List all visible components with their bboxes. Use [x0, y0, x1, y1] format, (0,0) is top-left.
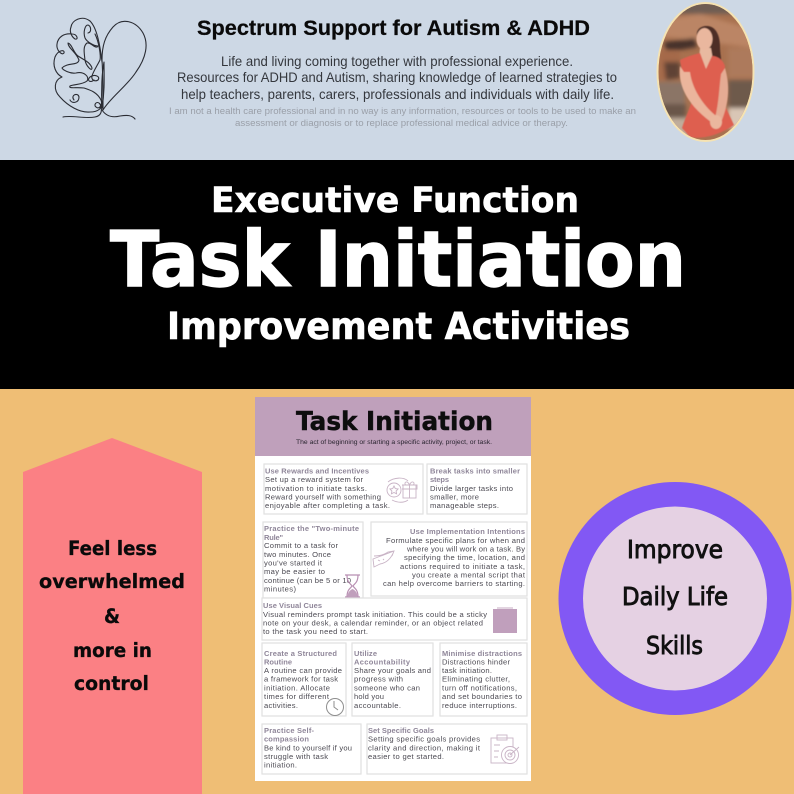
card: utilize accountability: someone who can — [354, 684, 420, 692]
card: create a structured routine — [262, 643, 346, 716]
icon: hourglass — [345, 575, 360, 597]
card: use implementation intentions: you create a mental script that — [412, 570, 526, 580]
card: practice self-compassion: Practice Self- — [264, 726, 314, 735]
icon: brain and heart line drawing — [54, 18, 146, 119]
icon: clock — [326, 698, 344, 716]
icon: plan arrow — [373, 551, 394, 567]
card: utilize accountability: hold you — [354, 692, 384, 701]
card: minimise distractions: Minimise distractions — [442, 649, 522, 658]
icon: clipboard and target — [491, 735, 519, 764]
text: disclaimer — [169, 106, 636, 129]
card: set specific goals: easier to get started. — [368, 752, 444, 761]
text: improve daily life skills: Improve — [627, 535, 723, 564]
text: feel less overwhelmed: more in — [73, 639, 152, 662]
card: two-minute rule: may be easier to — [264, 567, 325, 576]
text: feel less overwhelmed — [39, 537, 185, 695]
text: feel less overwhelmed: & — [104, 605, 120, 628]
card: two-minute rule: Practice the "Two-minute — [264, 524, 359, 533]
card: use rewards and incentives — [264, 464, 423, 514]
card: use rewards and incentives: Set up a reward system for — [265, 475, 363, 484]
panel: upward arrow callout — [23, 438, 202, 794]
card: use visual cues: to the task you need to start. — [263, 627, 368, 636]
text: feel less overwhelmed: control — [74, 672, 149, 695]
card: practice self-compassion: initiation. — [264, 760, 297, 770]
text: description: help teachers, parents, carers, professionals and individuals with daily life. — [181, 86, 614, 102]
title: Task Initiation: Task Initiation — [110, 216, 686, 305]
panel: daily life skills circle — [558, 482, 792, 715]
card: create a structured routine: Create a Structured — [264, 649, 337, 658]
card: utilize accountability: Utilize — [354, 649, 377, 658]
card: use implementation intentions: Use Implementation Intentions — [410, 527, 525, 536]
text: description — [177, 53, 617, 102]
card: minimise distractions: task initiation. — [442, 666, 492, 675]
card: minimise distractions: Eliminating clutter, — [442, 674, 510, 684]
card: minimise distractions: Distractions hinder — [442, 658, 510, 666]
card: break tasks into smaller steps: steps — [430, 475, 449, 484]
photo: woman in coral dress — [655, 0, 757, 145]
card: set specific goals: Setting specific goals provides — [368, 734, 480, 744]
card: break tasks into smaller steps: manageable steps. — [430, 501, 499, 510]
card: use rewards and incentives: Use Rewards and Incentives — [265, 466, 369, 476]
card: two-minute rule — [263, 522, 363, 598]
card: utilize accountability: Share your goals and — [354, 666, 431, 675]
card: use visual cues: Visual reminders prompt task initiation. This could be a sticky — [263, 610, 487, 619]
card: minimise distractions: turn off notifications, — [442, 684, 517, 692]
text: disclaimer: I am not a health care professional and in no way is any information, resources or tools to be used to make an — [169, 106, 636, 117]
card: set specific goals — [367, 724, 527, 774]
card: use implementation intentions: Formulate specific plans for when and — [386, 536, 525, 545]
heading: organisation name: Spectrum Support for Autism & ADHD — [197, 17, 590, 40]
card: practice self-compassion: compassion — [264, 734, 309, 744]
card: practice self-compassion: Be kind to yourself if you — [264, 744, 352, 752]
card: create a structured routine: Routine — [264, 658, 292, 666]
text: improve daily life skills — [622, 535, 728, 660]
card: minimise distractions: reduce interruptions. — [442, 701, 517, 710]
card: utilize accountability — [352, 643, 433, 716]
card: use visual cues: Use Visual Cues — [263, 601, 322, 610]
title band — [0, 160, 794, 389]
card: two-minute rule: you've started it — [264, 558, 323, 568]
card: use rewards and incentives: motivation to initiate tasks. — [265, 484, 367, 493]
card: two-minute rule: two minutes. Once — [264, 550, 331, 559]
card: minimise distractions — [440, 643, 527, 716]
card: break tasks into smaller steps: smaller, more — [430, 492, 479, 502]
header band — [0, 0, 794, 160]
card: two-minute rule: Rule" — [264, 533, 283, 542]
text: improve daily life skills: Skills — [646, 631, 703, 660]
card: create a structured routine: a framework for task — [264, 674, 338, 684]
icon: reward gift — [387, 478, 417, 502]
card: create a structured routine: times for different — [264, 692, 330, 701]
card: use implementation intentions: where you will work on a task. By — [406, 544, 525, 554]
card: use implementation intentions — [371, 522, 527, 596]
text: improve daily life skills: Daily Life — [622, 582, 728, 611]
title: Improvement Activities: Improvement Activities — [167, 305, 630, 348]
worksheet header — [255, 397, 531, 456]
card: use visual cues: note on your desk, a calendar reminder, or an object related — [263, 618, 483, 628]
card: break tasks into smaller steps: Break tasks into smaller — [430, 466, 520, 476]
text: description: Resources for ADHD and Autism, sharing knowledge of learned strategies to — [177, 69, 617, 85]
card: set specific goals: Set Specific Goals — [368, 726, 434, 735]
card: use implementation intentions: specifying the time, location, and — [404, 553, 525, 562]
card: minimise distractions: and set boundaries to — [442, 692, 522, 701]
text: feel less overwhelmed: overwhelmed — [39, 570, 185, 593]
card: use implementation intentions: actions required to initiate a task, — [400, 562, 525, 571]
text: feel less overwhelmed: Feel less — [68, 537, 157, 560]
card: create a structured routine: initiation. Allocate — [264, 684, 330, 692]
worksheet header: The act of beginning or starting a specific activity, project, or task. — [296, 439, 492, 446]
card: create a structured routine: activities. — [264, 701, 298, 710]
card: two-minute rule: Commit to a task for — [264, 541, 338, 550]
card: use visual cues — [262, 598, 527, 640]
text: disclaimer: assessment or diagnosis or to replace professional medical advice or therapy. — [235, 118, 568, 129]
card: utilize accountability: progress with — [354, 674, 403, 684]
card: break tasks into smaller steps: Divide larger tasks into — [430, 484, 513, 493]
card: two-minute rule: minutes) — [264, 584, 296, 594]
icon: sticky note — [493, 607, 517, 633]
panel: task initiation worksheet — [255, 397, 531, 781]
card: use implementation intentions: can help overcome barriers to starting. — [383, 579, 525, 588]
worksheet header: Task Initiation — [296, 407, 493, 437]
card: use rewards and incentives: Reward yourself with something — [265, 492, 381, 502]
card: utilize accountability: accountable. — [354, 701, 401, 710]
card: two-minute rule: continue (can be 5 or 10 — [264, 576, 351, 585]
card: use rewards and incentives: enjoyable after completing a task. — [265, 501, 390, 510]
text: description: Life and living coming together with professional experience. — [221, 53, 573, 69]
title: Executive Function: Executive Function — [211, 181, 579, 221]
card: practice self-compassion: struggle with task — [264, 752, 328, 761]
card: create a structured routine: A routine can provide — [264, 666, 342, 675]
card: set specific goals: clarity and direction, making it — [368, 744, 481, 752]
card: utilize accountability: Accountability — [354, 658, 411, 666]
card: practice self-compassion — [262, 724, 361, 774]
card: break tasks into smaller steps — [427, 464, 527, 514]
